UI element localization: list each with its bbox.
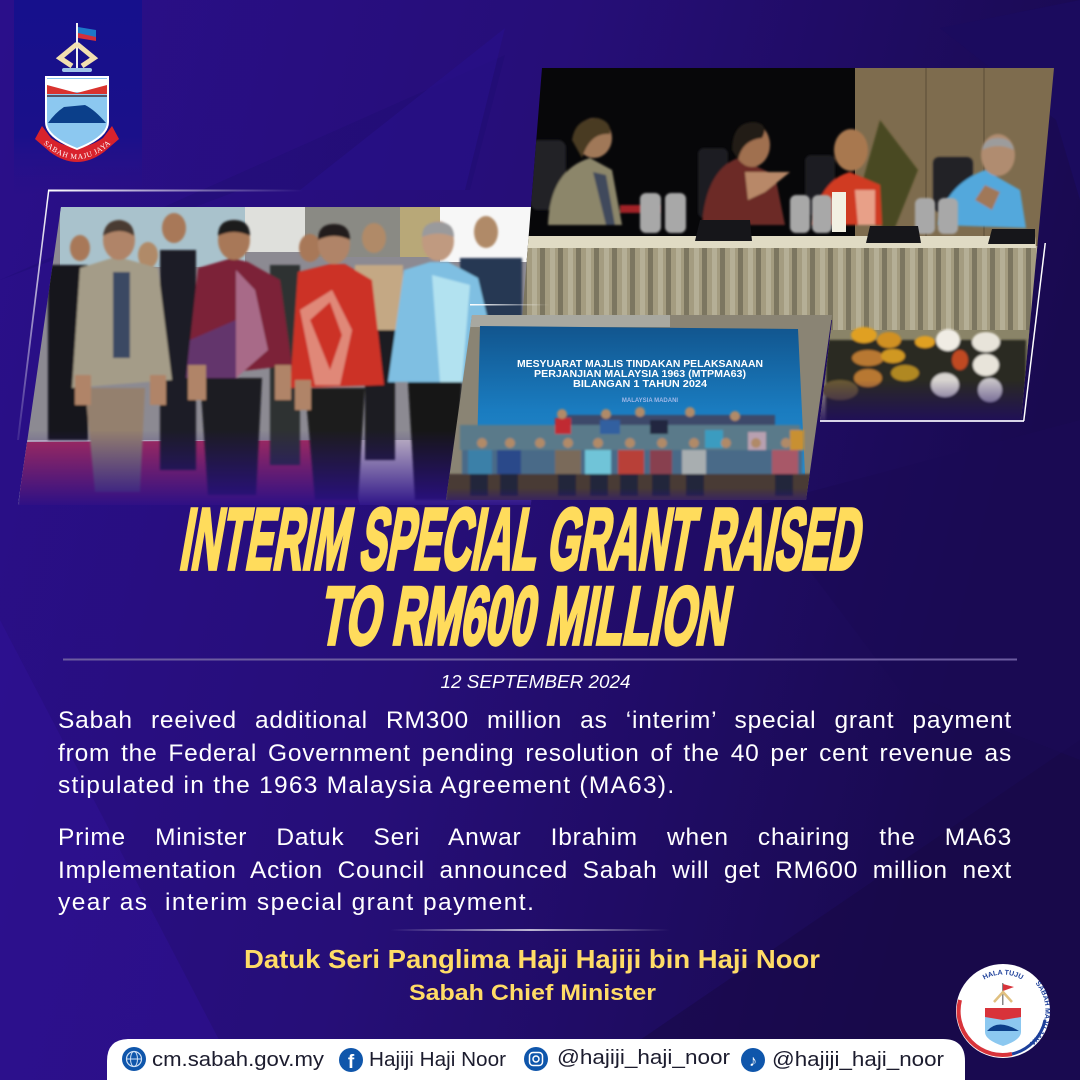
text block: paragraph one: from the Federal Government pending resolution of the 40 per cent revenue as [58,740,1012,767]
chief minister name: Sabah Chief Minister [409,980,656,1005]
banner text: BILANGAN 1 TAHUN 2024 [573,379,707,390]
facebook text: Hajiji Haji Noor [369,1049,506,1071]
text block: paragraph two: year as interim special grant payment. [58,889,535,916]
icon: facebook: f [348,1052,355,1073]
text block: paragraph one: Sabah reeived additional RM300 million as ‘interim’ special grant payment [58,707,1012,734]
photo: leaders walking [0,207,540,510]
text block: paragraph two: Implementation Action Council announced Sabah will get RM600 million next [58,857,1012,884]
photo: council table [522,68,1054,420]
banner text [517,359,763,404]
website text: cm.sabah.gov.my [152,1049,324,1071]
text block: paragraph one: stipulated in the 1963 Malaysia Agreement (MA63). [58,772,675,799]
title [175,491,871,662]
icon: instagram [524,1047,548,1071]
badge: Hala Tuju Sabah Maju Jaya: SABAH MAJU JAYA [1030,981,1050,1045]
photo: group portrait [440,315,840,505]
footer social bar [107,1039,965,1080]
instagram text: @hajiji_haji_noor [557,1047,730,1069]
batik figures [85,388,145,492]
badge: Hala Tuju Sabah Maju Jaya [956,964,1050,1058]
logo: Sabah state crest [35,23,119,162]
banner text: PERJANJIAN MALAYSIA 1963 (MTPMA63) [534,369,746,380]
date: 12 SEPTEMBER 2024 [440,671,630,692]
photo frame: right [470,243,1046,422]
tiktok text: @hajiji_haji_noor [772,1049,944,1071]
banner text: MESYUARAT MAJLIS TINDAKAN PELAKSANAAN [517,359,763,370]
chief minister name [244,944,820,1005]
icon: tiktok [741,1048,765,1072]
title: TO RM600 MILLION [315,570,739,662]
chief minister name: Datuk Seri Panglima Haji Hajiji bin Haji Noor [244,944,820,974]
photo frame: left [17,190,303,440]
text block: paragraph one [58,707,1012,799]
icon: website [122,1047,146,1071]
logo: Sabah state crest: SABAH MAJU JAYA [44,140,110,160]
text block: paragraph two [58,824,1012,916]
icon: tiktok: ♪ [749,1053,757,1070]
banner text: MALAYSIA MADANI [622,398,678,404]
icon: facebook [339,1048,363,1073]
badge: Hala Tuju Sabah Maju Jaya: HALA TUJU [982,970,1024,980]
text block: paragraph two: Prime Minister Datuk Seri Anwar Ibrahim when chairing the MA63 [58,824,1012,851]
